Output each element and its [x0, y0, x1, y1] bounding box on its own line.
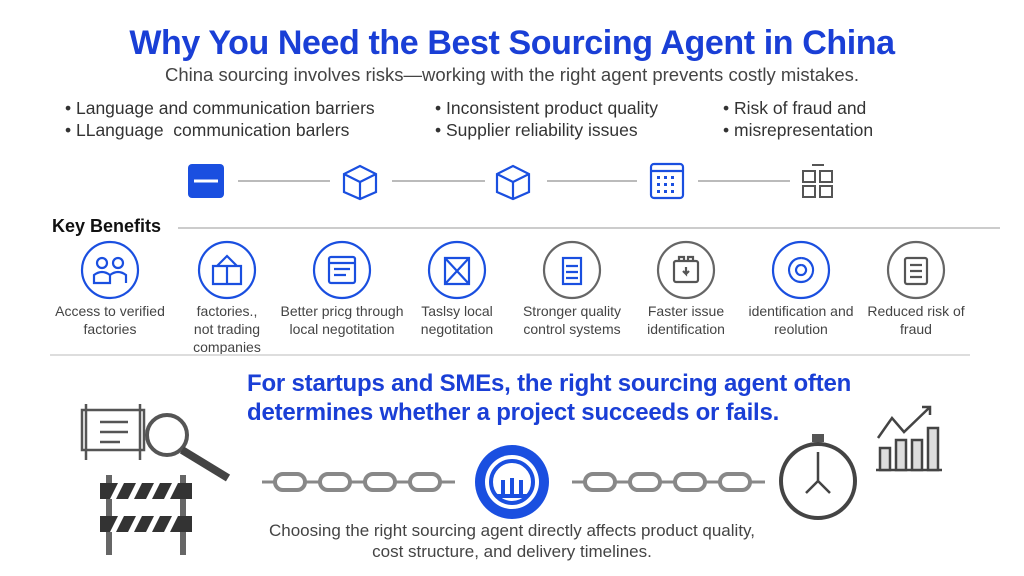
benefit labels [55, 303, 965, 355]
title: Why You Need the Best Sourcing Agent in China [129, 24, 895, 62]
callout: startups and SMEs: determines whether a project succeeds or fails. [247, 399, 779, 426]
subtitle: China sourcing involves risks—working with the right agent prevents costly mistakes. [165, 64, 859, 85]
callout: startups and SMEs: For startups and SMEs, the right sourcing agent often [247, 370, 851, 397]
bottom text: cost structure, and delivery timelines. [372, 542, 652, 561]
benefit labels: Taslsy local negotitation [421, 303, 493, 337]
bottom text [269, 521, 755, 561]
process icon row [188, 162, 833, 200]
bullet list: risks: • LLanguage communication barlers [65, 120, 349, 140]
benefit labels: Access to verified factories [55, 303, 165, 337]
callout: startups and SMEs [247, 370, 851, 426]
bullet list: risks: • misrepresentation [723, 120, 873, 140]
heading: Key Benefits: Key Benefits [52, 216, 161, 236]
benefit labels: identification and reolution [748, 303, 854, 337]
left illustrations [80, 404, 230, 555]
benefit labels: not trading companies [193, 321, 261, 355]
benefit labels: Better pricg through local negotitation [281, 303, 403, 337]
bullet list: risks: • Language and communication barriers [65, 98, 375, 118]
bullet list: risks: • Inconsistent product quality [435, 98, 658, 118]
bullet list: risks [65, 98, 873, 140]
bottom text: Choosing the right sourcing agent directly affects product quality, [269, 521, 755, 540]
benefit labels: factories., [197, 303, 257, 319]
benefit labels: Reduced risk of fraud [867, 303, 965, 337]
chains and central icon [262, 445, 765, 519]
benefit icons [80, 240, 946, 300]
bullet list: risks: • Supplier reliability issues [435, 120, 638, 140]
benefit labels: Faster issue identification [647, 303, 725, 337]
bullet list: risks: • Risk of fraud and [723, 98, 866, 118]
right illustrations: stopwatch and chart [779, 406, 942, 520]
benefit labels: Stronger quality control systems [523, 303, 621, 337]
